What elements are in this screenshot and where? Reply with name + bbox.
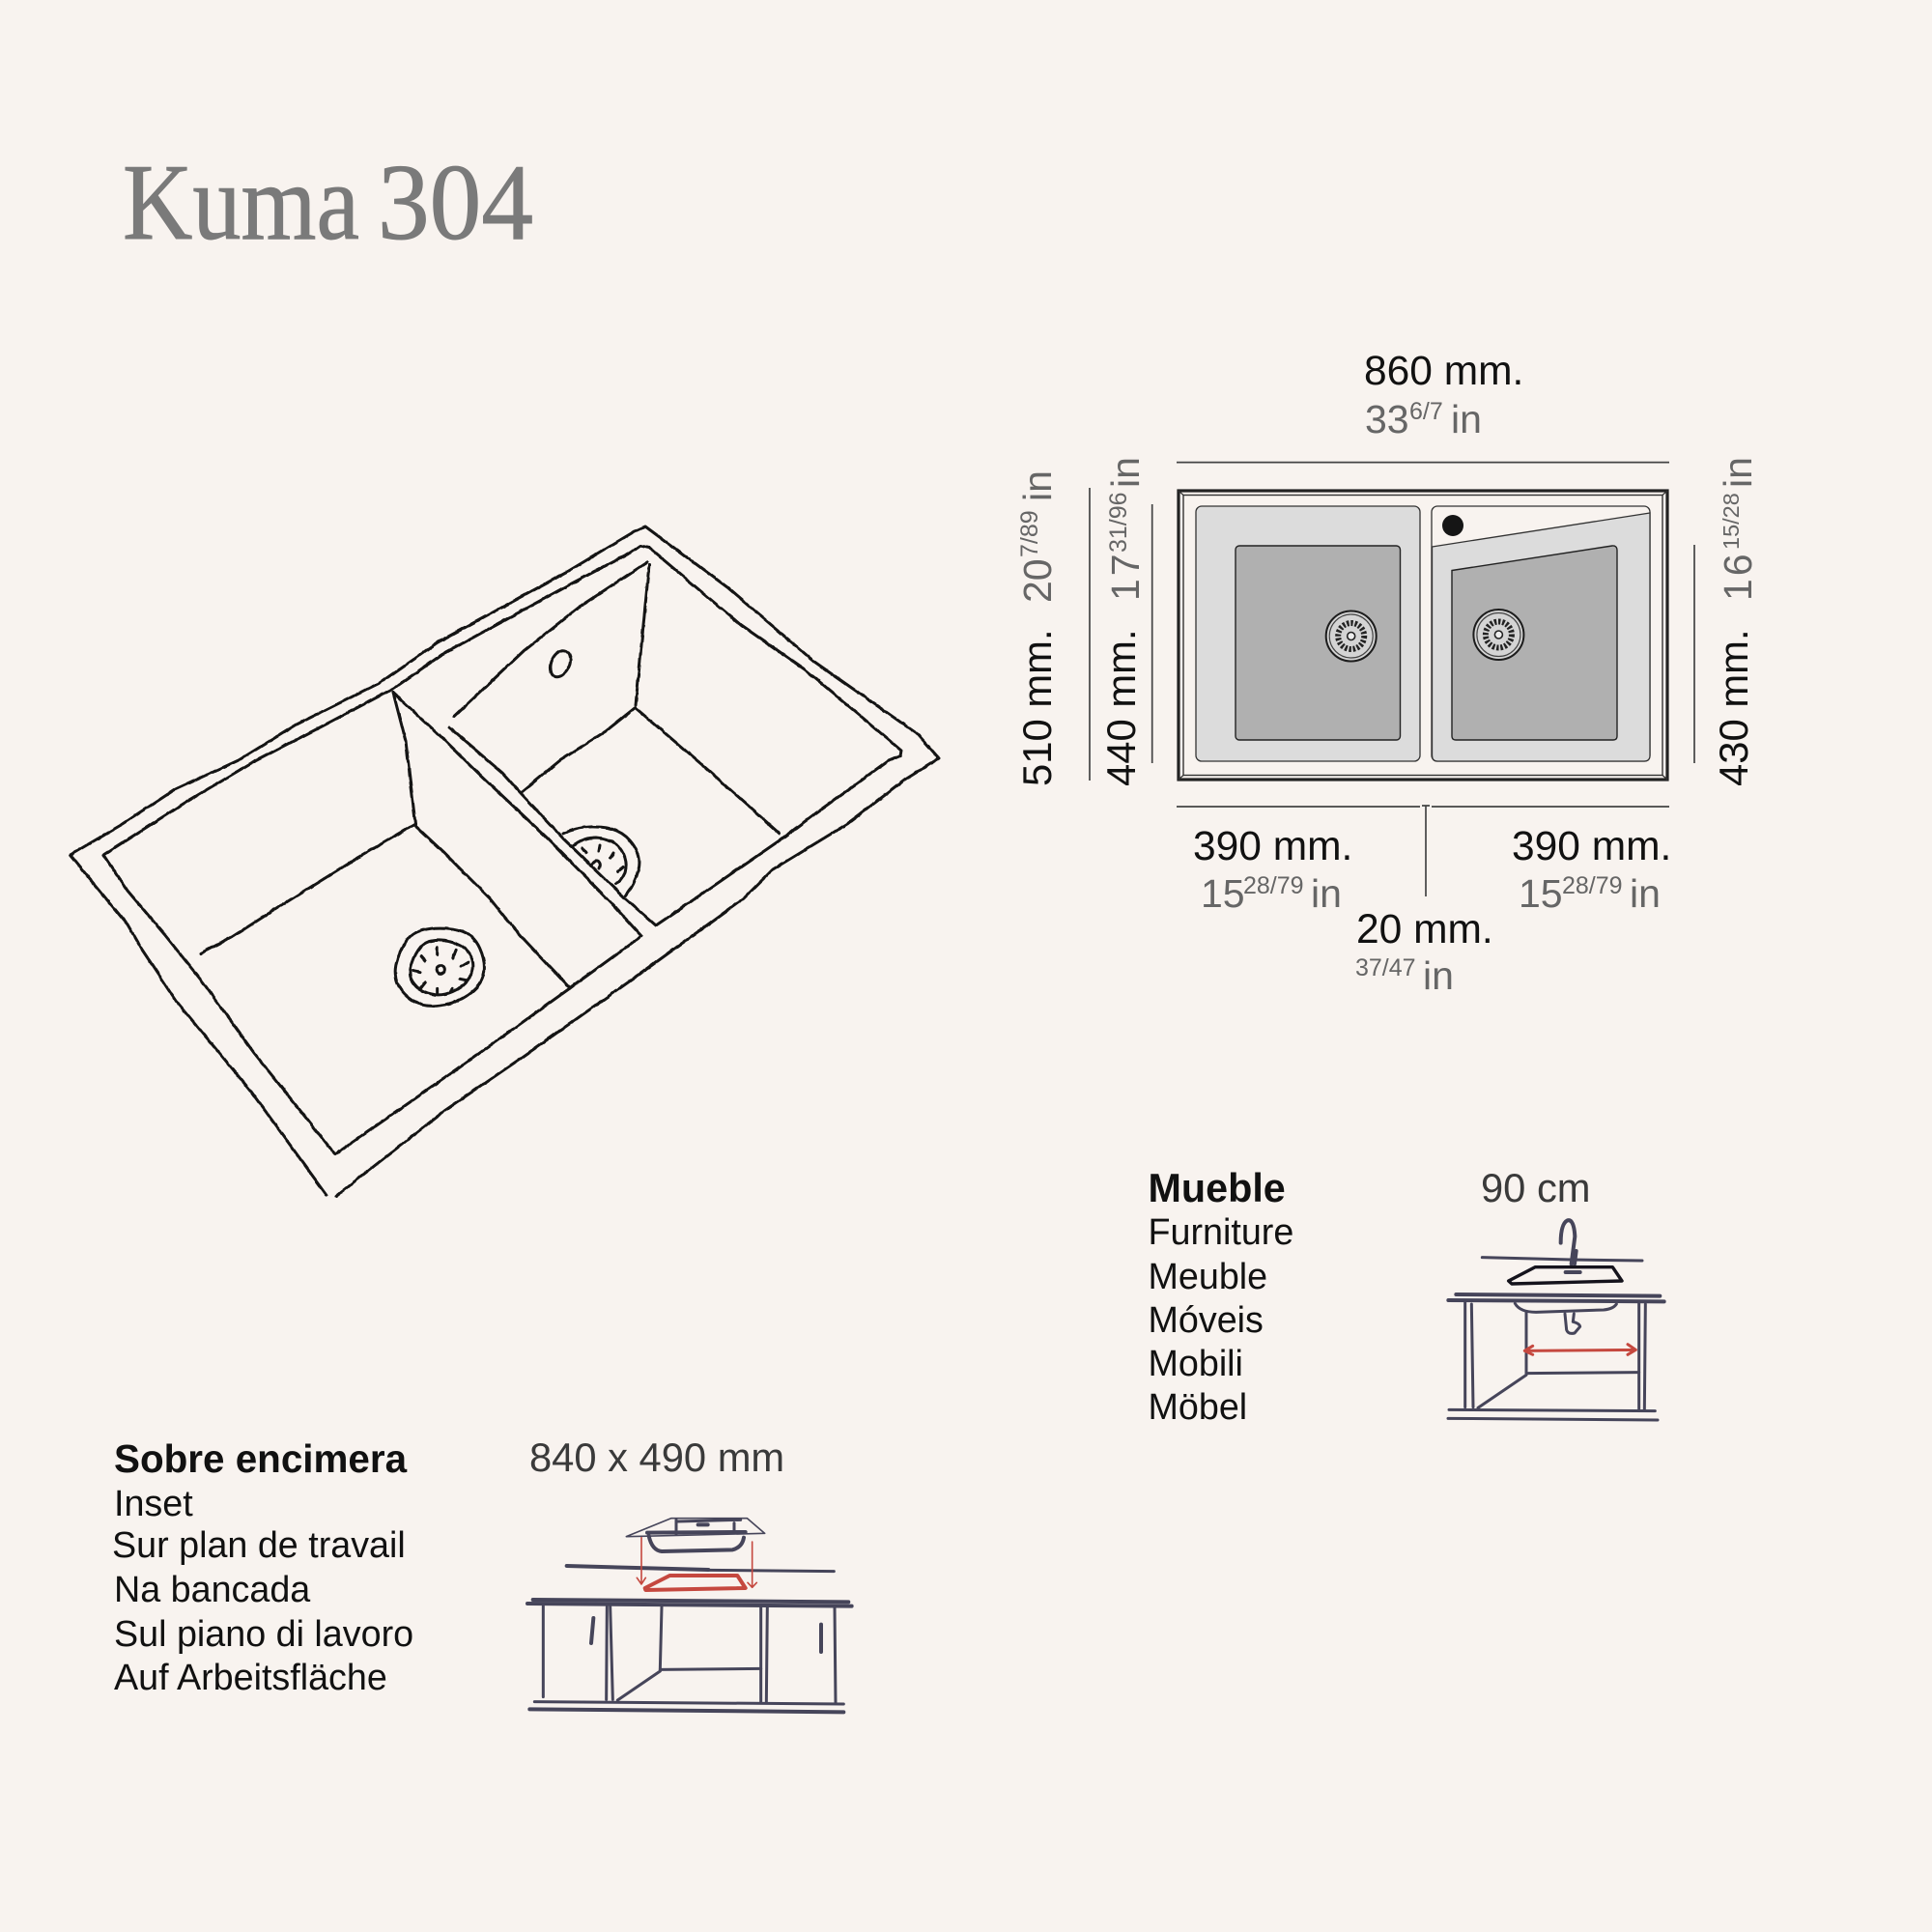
- title: 304: [378, 143, 533, 263]
- furniture text block: Mobili: [1148, 1343, 1243, 1383]
- icon: furniture sketch with faucet and width arrow: [1448, 1220, 1664, 1420]
- dimension: right bowl depth: 15/28: [1719, 493, 1744, 550]
- dimension: overall width: 6/7: [1409, 398, 1443, 425]
- dimension: left bowl depth: 440 mm.: [1098, 629, 1144, 786]
- dimension: left bowl depth: 17: [1103, 551, 1148, 601]
- right bowl: [1432, 506, 1650, 761]
- dimension: right bowl depth: in: [1716, 457, 1760, 488]
- inset text block: Auf Arbeitsfläche: [114, 1657, 387, 1697]
- icon: left drain: [395, 928, 484, 1006]
- dimension: overall depth: in: [1015, 470, 1060, 501]
- outer rim contour: [71, 526, 939, 1196]
- dimension: left bowl width: 28/79: [1243, 872, 1304, 899]
- dimension: divider width: [1355, 907, 1493, 998]
- icon: tap hole: [1442, 515, 1463, 536]
- front edge of left bowl and first divider edge: [103, 693, 641, 1154]
- icon: left drain: [1326, 611, 1377, 661]
- title: Kuma: [123, 143, 359, 263]
- dimension: right bowl depth: [1711, 457, 1760, 786]
- furniture text block: Mueble: [1148, 1166, 1286, 1210]
- dimension: divider width: in: [1423, 953, 1454, 998]
- dimension: left bowl width: 15: [1201, 871, 1245, 916]
- dimension: left bowl depth: [1098, 457, 1148, 786]
- dimension: overall depth: 7/89: [1016, 510, 1043, 557]
- inset text block: Sobre encimera: [114, 1436, 408, 1481]
- dimension: left bowl depth: in: [1103, 457, 1148, 488]
- dimension: overall width: [1364, 349, 1523, 441]
- dimension: overall depth: 510 mm.: [1014, 629, 1060, 786]
- dimension: right bowl width: 15: [1519, 871, 1563, 916]
- dimension lines: [1090, 463, 1694, 896]
- dimension: right bowl width: [1512, 824, 1671, 916]
- icon: inset sketch with sink dropping into counter: [527, 1519, 852, 1712]
- dimension: overall width: 33: [1365, 397, 1409, 441]
- dimension: right bowl width: in: [1630, 871, 1661, 916]
- furniture text block: Furniture: [1148, 1211, 1293, 1252]
- inset text block: Inset: [114, 1483, 193, 1523]
- dimension: divider width: 37/47: [1355, 954, 1416, 981]
- right bowl back corner: [454, 562, 647, 717]
- inset text block: Na bancada: [114, 1569, 310, 1609]
- title: [123, 143, 533, 263]
- furniture text block: [1148, 1166, 1293, 1427]
- dimension: left bowl width: 390 mm.: [1193, 824, 1352, 869]
- dimension: right bowl depth: 430 mm.: [1711, 629, 1756, 786]
- dimension: left bowl width: in: [1311, 871, 1342, 916]
- inner rim and second divider edge: [103, 546, 901, 925]
- dimension: overall depth: [1014, 470, 1060, 786]
- left bowl: [1196, 506, 1420, 761]
- outer frame: [1179, 491, 1667, 780]
- perspective line drawing of the double-bowl sink: [71, 526, 939, 1196]
- inset cut-out size: 840 x 490 mm: [529, 1435, 784, 1480]
- dimension: divider width: 20 mm.: [1356, 907, 1493, 952]
- dimension: left bowl depth: 31/96: [1105, 492, 1132, 553]
- dimension: overall width: in: [1451, 397, 1482, 441]
- dimension: left bowl width: [1193, 824, 1352, 916]
- furniture text block: Möbel: [1148, 1386, 1247, 1427]
- furniture text block: Móveis: [1148, 1299, 1264, 1340]
- furniture text block: Meuble: [1148, 1256, 1267, 1296]
- dimension: right bowl depth: 16: [1716, 551, 1760, 601]
- inset text block: [112, 1436, 413, 1697]
- inset text block: Sur plan de travail: [112, 1524, 406, 1565]
- dimension: right bowl width: 390 mm.: [1512, 824, 1671, 869]
- left bowl back corner: [393, 693, 415, 824]
- dimension: overall depth: 20: [1015, 558, 1060, 603]
- dimension: right bowl width: 28/79: [1562, 872, 1623, 899]
- top-view technical drawing of the sink: [1179, 491, 1667, 780]
- icon: tap hole: [546, 647, 575, 680]
- dimension: overall width: 860 mm.: [1364, 349, 1523, 394]
- furniture size: 90 cm: [1481, 1165, 1591, 1210]
- icon: right drain, partly hidden: [563, 827, 639, 895]
- inset text block: Sul piano di lavoro: [114, 1613, 413, 1654]
- icon: right drain: [1473, 610, 1523, 660]
